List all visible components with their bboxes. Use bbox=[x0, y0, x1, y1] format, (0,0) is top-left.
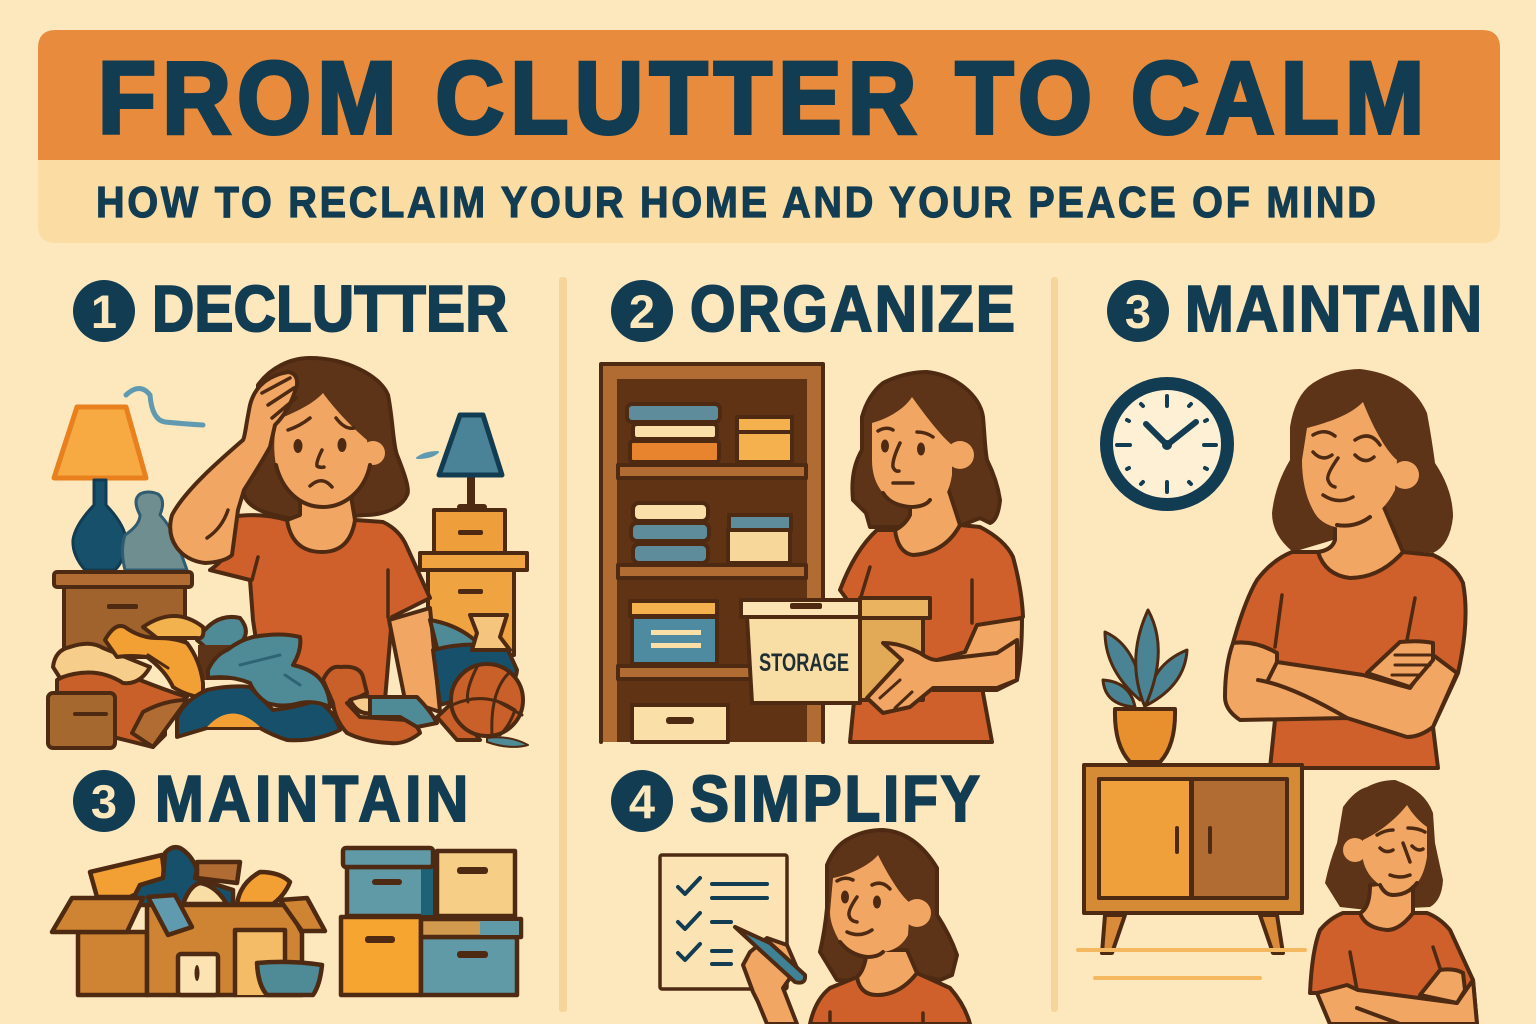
title: FROM CLUTTER TO CALM bbox=[98, 41, 1424, 155]
icon: plant bbox=[1103, 610, 1187, 762]
storage label: STORAGE bbox=[759, 649, 849, 677]
illustration: simplify scene bbox=[660, 830, 970, 1024]
column dividers bbox=[559, 277, 1058, 1012]
cabinet bbox=[1084, 765, 1302, 953]
illustration: maintain scene right bbox=[1078, 369, 1477, 1024]
storage box bbox=[741, 598, 1017, 713]
header banner bbox=[38, 30, 1500, 243]
illustration: maintain boxes bottom left bbox=[52, 847, 521, 995]
heading: 3 maintain (right): MAINTAIN bbox=[1185, 273, 1482, 346]
woman with box bbox=[840, 372, 1023, 742]
icon: clock bbox=[1106, 384, 1228, 504]
subtitle: HOW TO RECLAIM YOUR HOME AND YOUR PEACE OF MIND bbox=[96, 177, 1376, 226]
open box bbox=[52, 847, 325, 995]
heading: 3 maintain (bottom left): 3 bbox=[91, 775, 117, 828]
calm woman large bbox=[1225, 369, 1466, 768]
heading: 4 simplify: SIMPLIFY bbox=[690, 763, 980, 836]
heading: 2 organize: 2 bbox=[629, 285, 655, 338]
left nightstand bbox=[54, 572, 192, 657]
right dresser bbox=[417, 415, 527, 655]
checklist bbox=[660, 855, 787, 989]
calm woman small bbox=[1310, 780, 1477, 1024]
heading: 3 maintain (bottom left): MAINTAIN bbox=[155, 763, 468, 836]
bookshelf bbox=[601, 364, 823, 742]
heading: 1 declutter: 1 bbox=[91, 285, 117, 338]
woman stressed bbox=[170, 358, 440, 712]
hand on box bbox=[867, 640, 1017, 713]
squiggle bbox=[126, 388, 203, 425]
illustration: organize scene bbox=[601, 364, 1023, 742]
clothes pile bbox=[48, 615, 528, 748]
illustration: declutter scene bbox=[48, 358, 528, 748]
heading: 3 maintain (right): 3 bbox=[1125, 285, 1151, 338]
heading: 4 simplify: 4 bbox=[629, 775, 655, 828]
heading: 2 organize: ORGANIZE bbox=[690, 273, 1015, 346]
stacked boxes bbox=[341, 848, 521, 995]
woman writing bbox=[735, 830, 970, 1024]
icon: left lamp bbox=[54, 407, 146, 570]
heading: 1 declutter: DECLUTTER bbox=[152, 273, 508, 346]
icon: grey vase bbox=[122, 492, 187, 570]
